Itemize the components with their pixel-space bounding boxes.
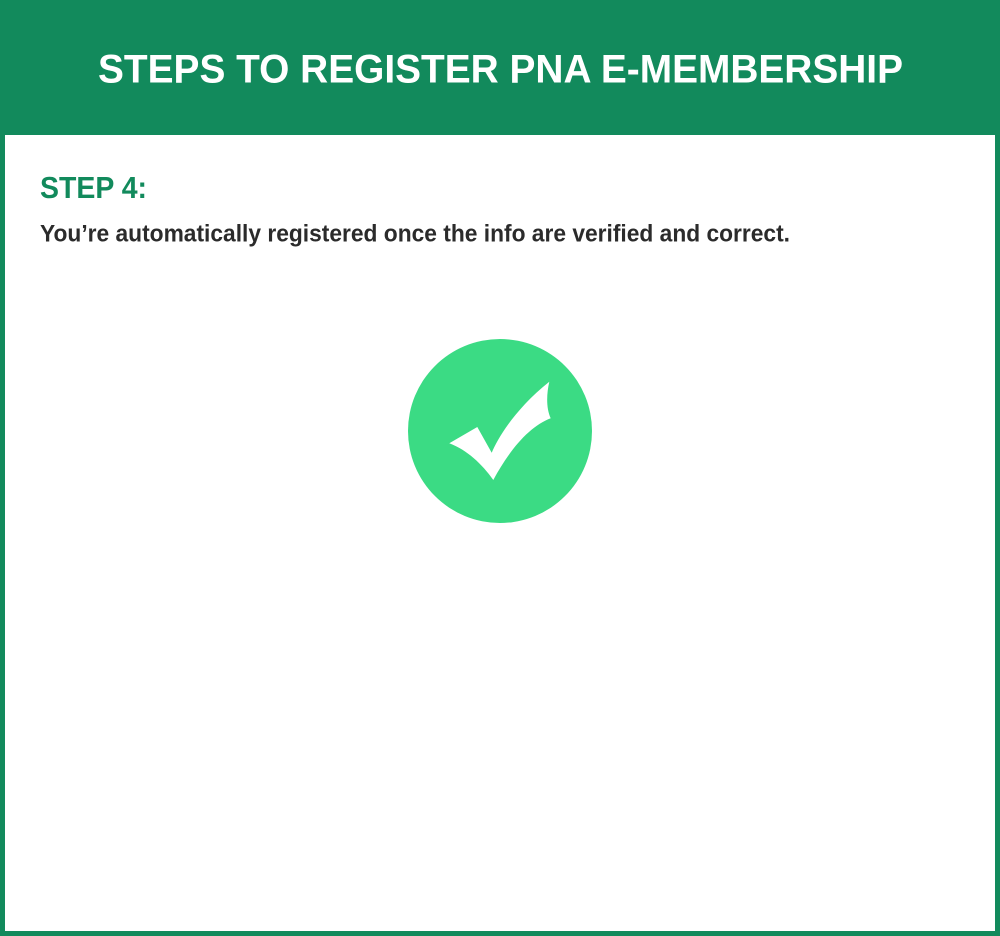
step heading: STEP 4: xyxy=(40,170,147,205)
header band xyxy=(0,0,1000,135)
title: STEPS TO REGISTER PNA E-MEMBERSHIP xyxy=(98,48,903,92)
step description: You’re automatically registered once the info are verified and correct. xyxy=(40,220,790,248)
icon: green check mark badge xyxy=(408,339,592,523)
